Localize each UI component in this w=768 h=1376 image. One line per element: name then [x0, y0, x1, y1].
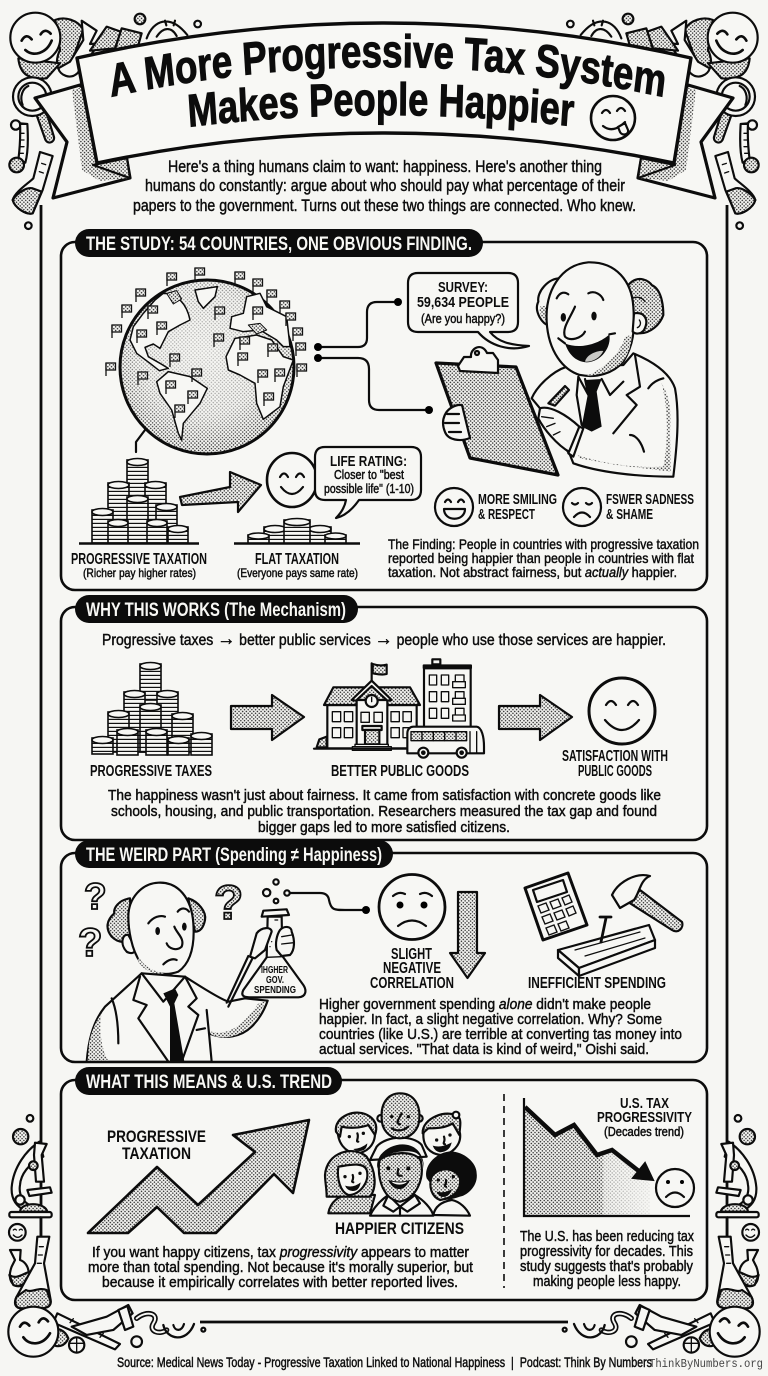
- callout: life rating: possible life" (1-10): [324, 482, 414, 496]
- icon: question marks: ?: [78, 921, 102, 965]
- text: mechanism summary: Progressive taxes → better public services → people who use those services are happier.: [102, 628, 666, 650]
- arrow: rising zigzag: [88, 1120, 309, 1233]
- arrow: [499, 695, 572, 740]
- decoration: bottom-right doodle corner: [563, 1115, 760, 1357]
- label: fewer sadness: [606, 491, 694, 523]
- text: what this means: [88, 1244, 474, 1291]
- label: more smiling: MORE SMILING: [478, 491, 557, 508]
- label: U.S. tax progressivity: [597, 1095, 692, 1139]
- label: fewer sadness: & SHAME: [606, 506, 653, 523]
- icon: progressive coin stacks: [92, 458, 188, 543]
- text: the finding: taxation. Not abstract fairness, but actually happier.: [388, 564, 677, 580]
- text: mechanism explanation: bigger gaps led to more satisfied citizens.: [258, 820, 510, 836]
- icon: sad face: [656, 1169, 694, 1207]
- label: slight negative correlation: CORRELATION: [370, 975, 454, 992]
- label: U.S. tax progressivity: (Decades trend): [604, 1125, 684, 1139]
- label: flat taxation: [237, 551, 358, 580]
- label: slight negative correlation: NEGATIVE: [383, 960, 441, 977]
- label: fewer sadness: FSWER SADNESS: [606, 491, 694, 508]
- title: A More Progressive Tax System: [111, 33, 664, 98]
- label: progressive taxation: PROGRESSIVE: [107, 1128, 206, 1146]
- text: what this means: more than total spending. Not because it's morally superior, but: [88, 1259, 474, 1276]
- heading: the study: THE STUDY: 54 COUNTRIES, ONE OBVIOUS FINDING.: [86, 234, 472, 255]
- icon: flat coin stacks: [248, 518, 346, 543]
- heading: weird part: THE WEIRD PART (Spending ≠ Happiness): [86, 845, 382, 866]
- callout: survey: (Are you happy?): [421, 311, 505, 326]
- heading: the study: [75, 229, 483, 257]
- text: weird part explanation: happier. In fact, a slight negative correlation. Why? Some: [319, 1011, 662, 1028]
- icon: calculator: [525, 873, 587, 940]
- callout: life rating: [315, 447, 421, 518]
- label: U.S. tax progressivity: PROGRESSIVITY: [597, 1109, 692, 1126]
- text: U.S. trend: [520, 1228, 694, 1290]
- text: the finding: [388, 536, 699, 580]
- label: U.S. tax progressivity: U.S. TAX: [620, 1095, 669, 1112]
- panel: the study: [61, 229, 707, 590]
- callout: life rating: Closer to "best: [334, 468, 404, 482]
- connector lines: globe to survey and clipboard: [314, 298, 433, 414]
- label: progressive taxes: PROGRESSIVE TAXES: [90, 763, 212, 780]
- text: mechanism explanation: The happiness wasn't just about fairness. It came from satisfaction with concrete goods like: [108, 788, 661, 804]
- icon: sad face: [563, 488, 601, 526]
- arrow: [231, 695, 304, 740]
- decoration: top-right doodle corner: [567, 13, 759, 229]
- decoration: top-left doodle corner: [9, 13, 201, 229]
- callout: survey: [408, 273, 529, 348]
- label: happier citizens: HAPPIER CITIZENS: [335, 1220, 464, 1238]
- heading: what this means: WHAT THIS MEANS & U.S. TREND: [86, 1072, 332, 1093]
- icon: flask with hand: IHGHER: [261, 965, 289, 976]
- label: satisfaction: PUBLIC GOODS: [578, 763, 652, 780]
- label: inefficient spending: INEFFICIENT SPENDING: [528, 975, 666, 992]
- panel: the weird part: [61, 840, 707, 1062]
- label: slight negative correlation: [370, 946, 454, 992]
- icon: school, tower and bus: [314, 659, 484, 758]
- heading: mechanism: WHY THIS WORKS (The Mechanism): [86, 600, 346, 621]
- icon: laughing face: [435, 488, 473, 526]
- label: slight negative correlation: SLIGHT: [391, 946, 432, 963]
- label: more smiling: [478, 491, 557, 523]
- label: progressive taxation: (Richer pay higher rates): [83, 566, 196, 580]
- text: weird part explanation: Higher government spending alone didn't make people: [319, 996, 651, 1013]
- text: weird part explanation: [319, 996, 682, 1058]
- label: progressive taxation: [107, 1128, 206, 1163]
- label: progressive taxation: TAXATION: [122, 1145, 191, 1163]
- illustration: happy scientist with clipboard: [436, 262, 678, 477]
- callout: survey: SURVEY:: [438, 279, 488, 296]
- text: U.S. trend: The U.S. has been reducing tax: [520, 1228, 694, 1245]
- illustration: group of happy citizens: [325, 1093, 477, 1216]
- illustration: puzzled scientist: [87, 883, 268, 1062]
- label: satisfaction: [562, 748, 668, 780]
- label: progressive taxation: [71, 551, 207, 580]
- label: flat taxation: (Everyone pays same rate): [237, 566, 358, 580]
- icon: question marks: ?: [214, 877, 243, 930]
- label: flat taxation: FLAT TAXATION: [255, 551, 339, 568]
- heading: what this means: [75, 1067, 342, 1095]
- icon: tongue-out smiley: [591, 96, 635, 140]
- icon: flask with hand: [227, 879, 305, 1007]
- text: the finding: reported being happier than people in countries with flat: [388, 550, 694, 566]
- callout: life rating: LIFE RATING:: [330, 454, 407, 470]
- title: Makes People Happier: [188, 81, 575, 131]
- icon: question marks: [78, 876, 243, 965]
- heading: mechanism: [75, 595, 358, 623]
- decoration: bottom-left doodle corner: [8, 1115, 205, 1357]
- label: satisfaction: SATISFACTION WITH: [562, 748, 668, 765]
- icon: flask with hand: GOV.: [266, 975, 284, 986]
- text: U.S. trend: progressivity for decades. This: [520, 1243, 693, 1260]
- text: mechanism explanation: schools, housing, and public transportation. Researchers measured the tax gap and found: [111, 804, 657, 820]
- panel: why this works: [61, 595, 707, 840]
- title: [111, 33, 664, 131]
- intro paragraph: humans do constantly: argue about who should pay what percentage of their: [145, 176, 625, 195]
- icon: sad face: [379, 874, 445, 940]
- text: weird part explanation: actual services. "That data is kind of weird," Oishi said.: [319, 1041, 649, 1058]
- text: the finding: The Finding: People in countries with progressive taxation: [388, 536, 699, 552]
- arrow: down: [450, 892, 485, 978]
- icon: globe with flags: [106, 268, 306, 454]
- title banner: [33, 21, 735, 200]
- icon: question marks: ?: [84, 876, 107, 917]
- icon: big smiley: [589, 678, 655, 744]
- callout: survey: 59,634 PEOPLE: [417, 294, 509, 311]
- text: weird part explanation: countries (like U.S.) are terrible at converting tas money into: [319, 1026, 682, 1043]
- text: U.S. trend: study suggests that's probably: [520, 1258, 693, 1275]
- intro paragraph: papers to the government. Turns out these two things are connected. Who knew.: [133, 196, 636, 215]
- icon: coins: [92, 662, 212, 755]
- icon: hammer and nail on plank: [558, 875, 682, 976]
- heading: weird part: [75, 840, 393, 868]
- arrow: progressive to happy: [180, 472, 261, 512]
- icon: flask with hand: SPENDING: [254, 985, 296, 996]
- panel: what this means: [61, 1067, 707, 1300]
- text: what this means: If you want happy citizens, tax progressivity appears to matter: [92, 1244, 469, 1261]
- text: mechanism explanation: [108, 788, 661, 836]
- intro paragraph: Here's a thing humans claim to want: happiness. Here's another thing: [168, 157, 602, 176]
- text: U.S. trend: making people less happy.: [533, 1273, 681, 1290]
- text: what this means: because it empirically correlates with better reported lives.: [102, 1274, 458, 1291]
- chart: U.S. tax progressivity decline: [524, 1098, 690, 1216]
- icon: smiley: [267, 453, 317, 507]
- label: better public goods: BETTER PUBLIC GOODS: [331, 763, 469, 780]
- connector: flask to sad face: [284, 890, 370, 914]
- label: more smiling: & RESPECT: [478, 506, 535, 523]
- intro paragraph: [133, 157, 636, 215]
- label: progressive taxation: PROGRESSIVE TAXATION: [71, 551, 207, 568]
